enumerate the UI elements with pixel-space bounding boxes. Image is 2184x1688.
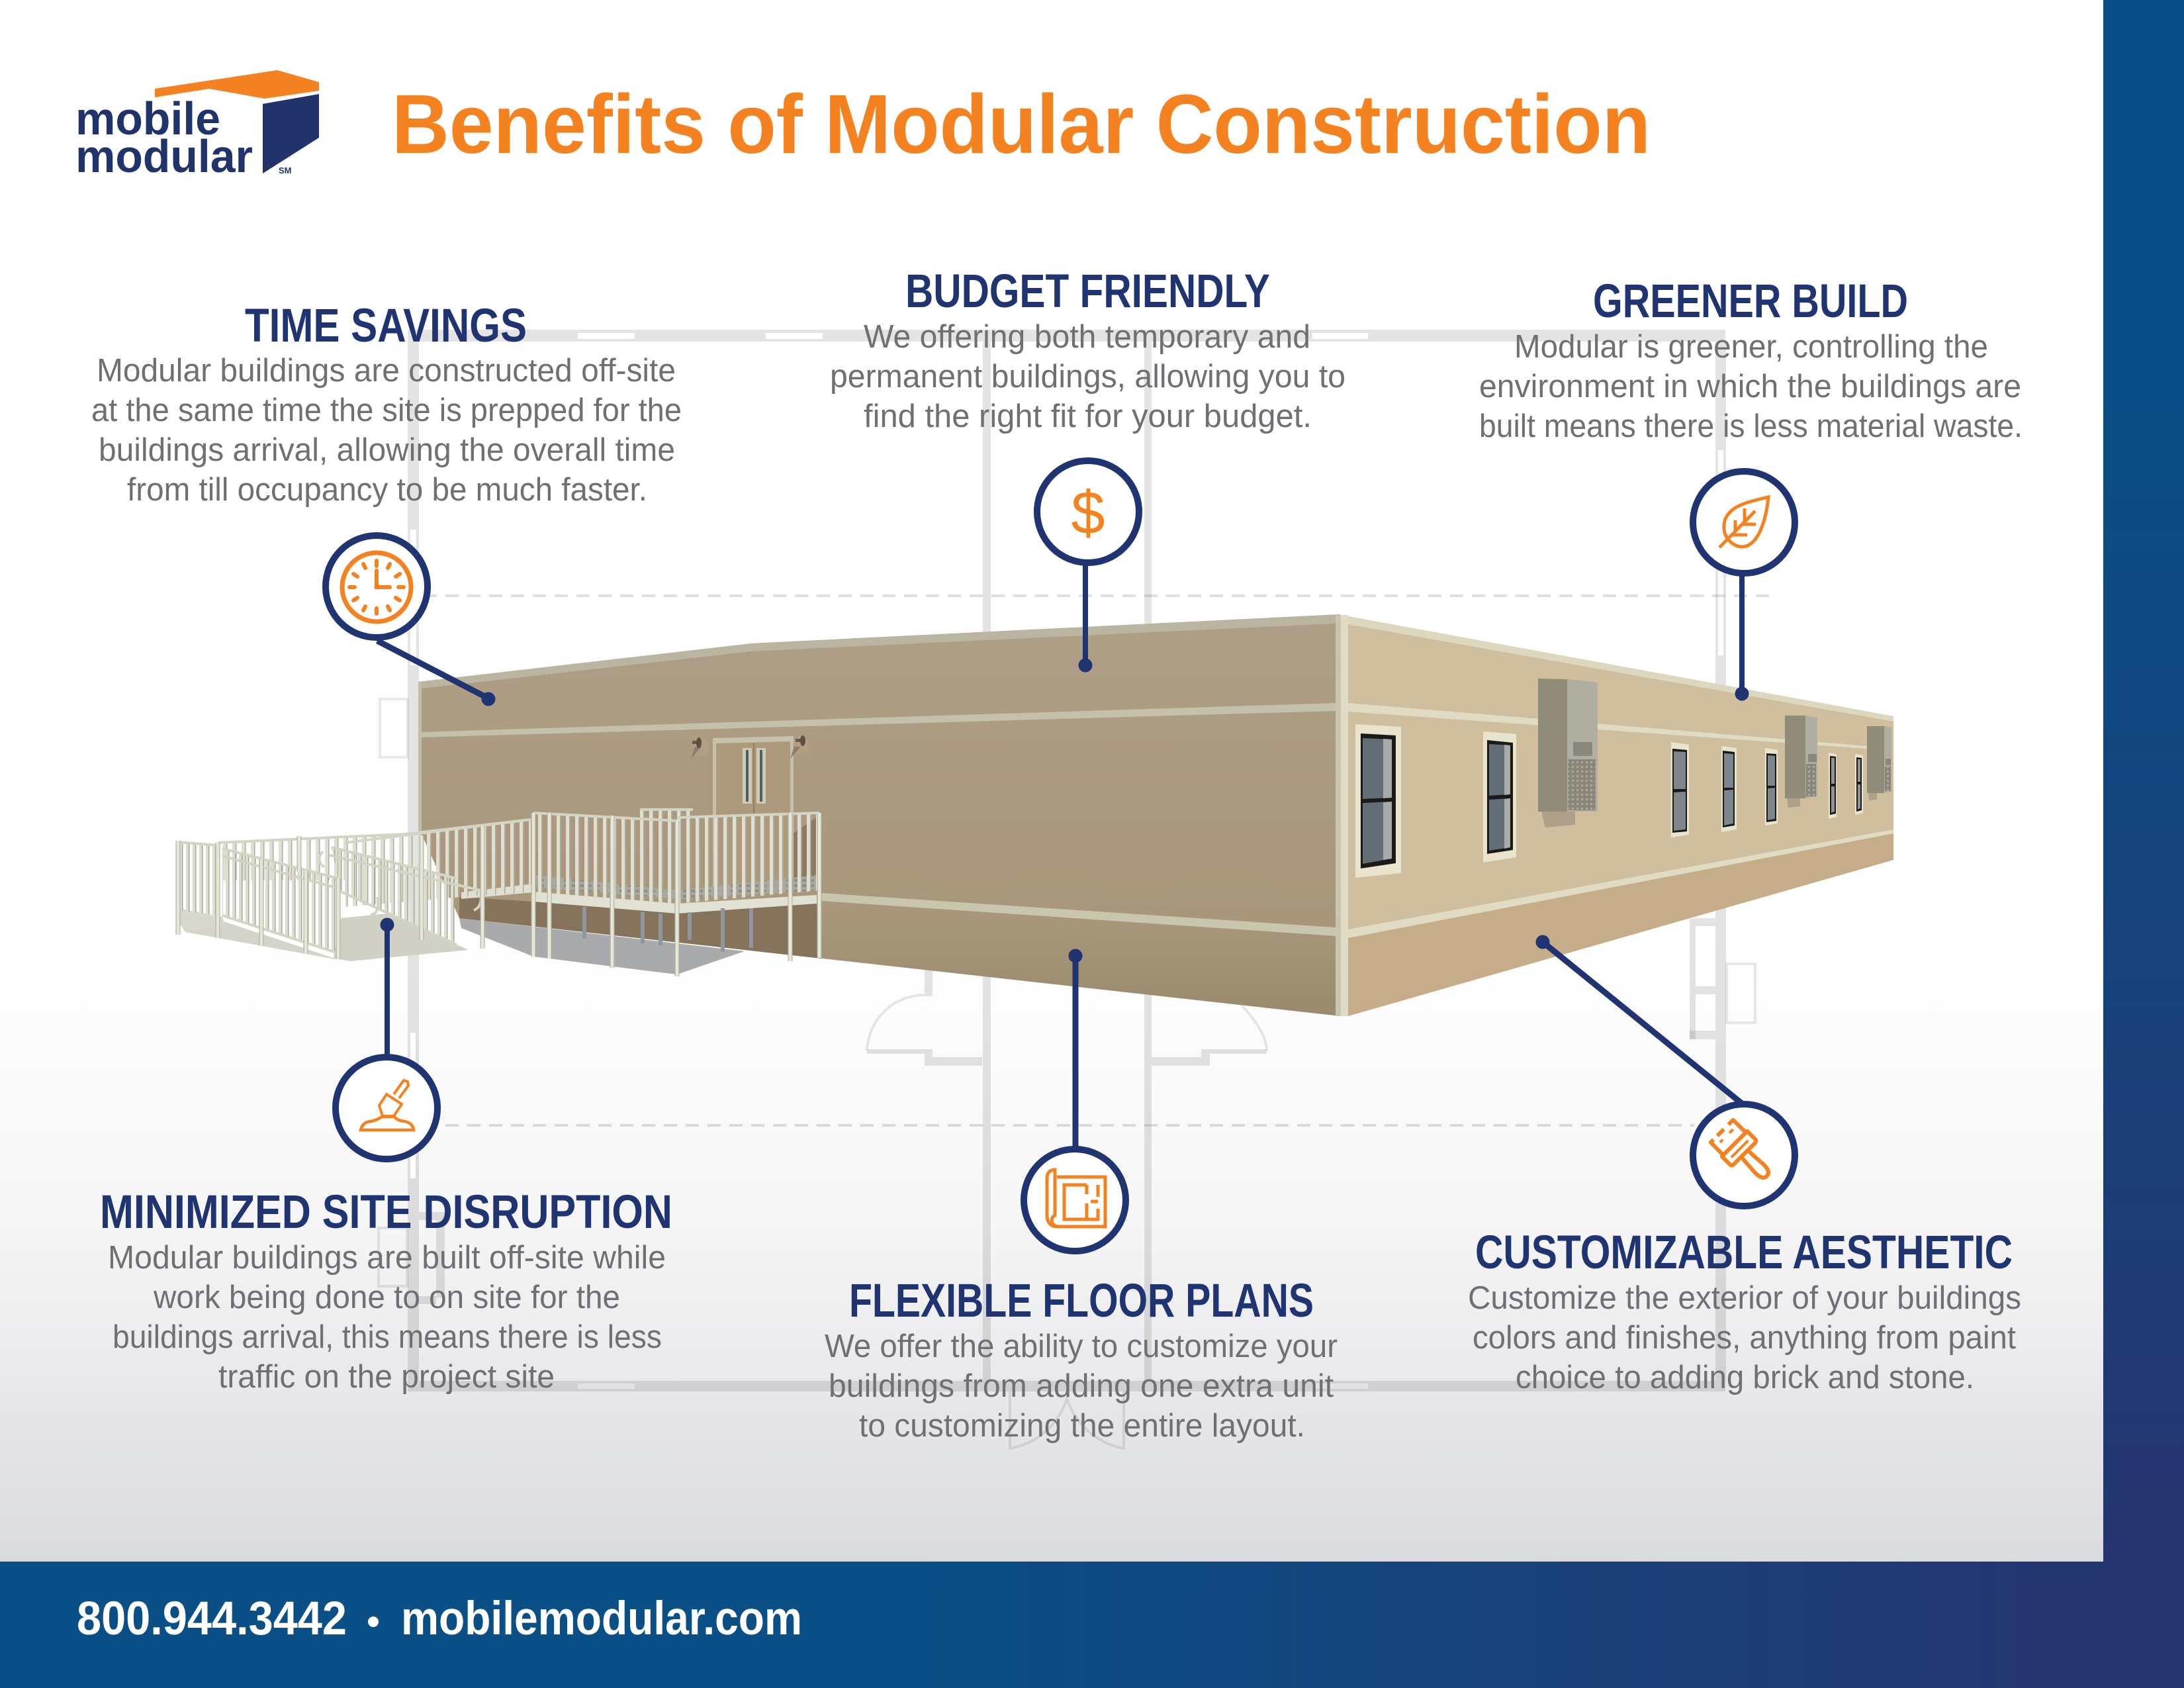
block: minimized site disruption: MINIMIZED SITE DISRUPTION [100, 1186, 672, 1239]
logo [75, 70, 319, 182]
front wall top trim [418, 614, 1340, 688]
floor plan window gaps [410, 333, 1723, 1389]
block: flexible floor plans: FLEXIBLE FLOOR PLANS [849, 1275, 1314, 1327]
block: minimized site disruption: Modular buildings are built off-site while [108, 1240, 666, 1276]
block: customizable aesthetic [1468, 1227, 2021, 1395]
icon: dollar sign: $ [1071, 479, 1105, 547]
wall AC unit mid [1785, 716, 1817, 808]
connector: greener build [1735, 573, 1749, 700]
icon: dollar sign [1037, 461, 1139, 563]
connector: budget friendly [1079, 563, 1092, 673]
wall AC unit large [1538, 679, 1598, 827]
floor plan dashed lines [424, 596, 1774, 1125]
wall AC unit far [1867, 726, 1891, 800]
block: time savings: Modular buildings are constructed off-site [97, 353, 676, 389]
front wall stripes [420, 703, 1336, 737]
railing posts [178, 813, 819, 976]
block: flexible floor plans: to customizing the entire layout. [859, 1408, 1305, 1444]
block: customizable aesthetic: choice to adding brick and stone. [1516, 1360, 1974, 1395]
block: greener build [1479, 275, 2023, 444]
block: customizable aesthetic: Customize the exterior of your buildings [1468, 1280, 2021, 1316]
right sidebar [2103, 0, 2184, 1562]
side wall [1341, 615, 1893, 1016]
block: time savings: at the same time the site is prepped for the [91, 393, 682, 428]
logo: mobile [75, 93, 220, 144]
block: minimized site disruption: work being done to on site for the [153, 1280, 620, 1315]
footer bar [0, 1562, 2184, 1688]
building illustration [178, 614, 1893, 1016]
ramp surface [334, 914, 469, 961]
floor plan background [408, 330, 1726, 1391]
deck and ramp railing [178, 810, 819, 976]
icon: clock [326, 536, 428, 637]
block: budget friendly: find the right fit for your budget. [864, 399, 1312, 434]
block: greener build: environment in which the buildings are [1479, 369, 2021, 404]
wall lights [691, 735, 809, 759]
logo: modular [75, 130, 253, 182]
footer bar: 800.944.3442 [77, 1593, 347, 1645]
double door [713, 736, 794, 894]
floor plan thin outlines and door swings [379, 699, 1755, 1448]
connector: time savings [377, 641, 495, 706]
block: minimized site disruption [100, 1186, 672, 1395]
title: Benefits of Modular Construction [392, 77, 1651, 171]
block: minimized site disruption: traffic on the project site [218, 1359, 555, 1395]
block: time savings: TIME SAVINGS [245, 300, 527, 352]
block: budget friendly: permanent buildings, allowing you to [830, 359, 1345, 395]
footer bar: mobilemodular.com [401, 1593, 802, 1645]
ground shadow under deck [459, 918, 745, 974]
logo: SM [279, 165, 291, 175]
block: time savings [91, 300, 682, 508]
metal support piers [584, 907, 751, 952]
connector: customizable aesthetic [1535, 935, 1742, 1103]
block: budget friendly [830, 265, 1345, 434]
block: greener build: built means there is less material waste. [1479, 408, 2023, 444]
block: budget friendly: We offering both temporary and [864, 319, 1310, 355]
block: customizable aesthetic: CUSTOMIZABLE AESTHETIC [1475, 1227, 2013, 1279]
shaded wall under deck [459, 897, 821, 959]
block: greener build: Modular is greener, controlling the [1514, 329, 1988, 365]
side windows [1355, 724, 1863, 878]
connector: flexible floor plans [1068, 949, 1083, 1149]
block: flexible floor plans: buildings from adding one extra unit [829, 1368, 1334, 1404]
block: minimized site disruption: buildings arrival, this means there is less [113, 1319, 662, 1355]
icon: trowel [336, 1057, 437, 1159]
block: budget friendly: BUDGET FRIENDLY [905, 265, 1270, 318]
connector: minimized site disruption [380, 917, 394, 1056]
block: greener build: GREENER BUILD [1593, 275, 1908, 328]
block: time savings: buildings arrival, allowing the overall time [99, 432, 675, 468]
block: time savings: from till occupancy to be much faster. [127, 472, 647, 508]
icon: floor plan scroll [1024, 1149, 1126, 1251]
block: customizable aesthetic: colors and finishes, anything from paint [1473, 1320, 2016, 1356]
icon: leaf [1693, 471, 1795, 573]
icon: paint brush [1693, 1104, 1795, 1206]
block: flexible floor plans: We offer the ability to customize your [825, 1329, 1338, 1364]
block: flexible floor plans [825, 1275, 1338, 1444]
front wall [418, 614, 1340, 1016]
